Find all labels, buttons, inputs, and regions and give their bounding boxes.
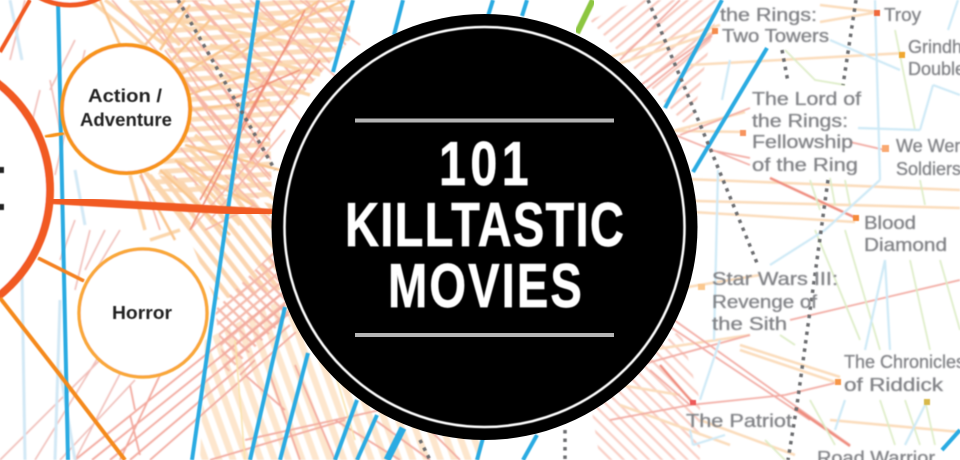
label: Horror: Horror <box>112 303 172 323</box>
label: Troy: Troy <box>884 5 921 25</box>
hub: main category circle <box>0 55 50 325</box>
label: The Lord of the Rings: Two Towers: Two Towers <box>722 26 829 46</box>
label: The Patriot: The Patriot <box>686 411 792 431</box>
link from hub to Horror <box>38 258 84 281</box>
title: 101 Killtastic Movies: 101 <box>439 129 529 198</box>
dotted links <box>178 0 856 460</box>
green movie link <box>577 0 593 33</box>
label: Action / Adventure: Adventure <box>80 110 172 130</box>
badge inner ring <box>284 27 684 427</box>
title badge <box>272 14 698 440</box>
label: Action / Adventure: Action / <box>88 86 162 106</box>
thick link from hub to badge <box>50 200 275 213</box>
badge top rule <box>355 118 614 122</box>
label: The Lord of the Rings: Two Towers: the Rings: <box>720 5 817 25</box>
label: The Lord of the Rings: Fellowship of the Ring: of the Ring <box>752 155 858 175</box>
link from hub to lower genre <box>0 298 125 460</box>
network mesh: right of badge <box>590 0 960 460</box>
hub dots <box>0 167 4 210</box>
label: Star Wars III: Revenge of the Sith: Star Wars III: <box>712 269 838 289</box>
link from hub to Action / Adventure <box>45 133 64 137</box>
label: The Lord of the Rings: Fellowship of the Ring: the Rings: <box>752 111 848 131</box>
label: The Lord of the Rings: Fellowship of the Ring: The Lord of <box>752 89 862 109</box>
label: Star Wars III: Revenge of the Sith: Revenge of <box>712 292 818 312</box>
title: 101 Killtastic Movies <box>345 129 624 321</box>
node: Action / Adventure <box>62 45 190 173</box>
node: Horror <box>79 249 207 377</box>
network mesh: left of badge <box>0 0 480 460</box>
label: We Were Soldiers: Soldiers <box>896 159 960 179</box>
badge bottom rule <box>355 333 614 337</box>
label: The Chronicles of Riddick: of Riddick <box>844 375 944 395</box>
hub link to top genre <box>0 0 30 52</box>
movie node markers <box>690 10 930 405</box>
hub: top genre circle <box>5 0 135 5</box>
label: Blood Diamond: Blood <box>864 213 916 233</box>
label: The Lord of the Rings: Fellowship of the Ring: Fellowship <box>752 132 853 152</box>
movie labels <box>686 5 960 460</box>
title: 101 Killtastic Movies: KILLTASTIC <box>345 190 624 260</box>
label: Star Wars III: Revenge of the Sith: the Sith <box>712 314 787 334</box>
title: 101 Killtastic Movies: MOVIES <box>388 251 582 321</box>
label: Blood Diamond: Diamond <box>864 235 947 255</box>
